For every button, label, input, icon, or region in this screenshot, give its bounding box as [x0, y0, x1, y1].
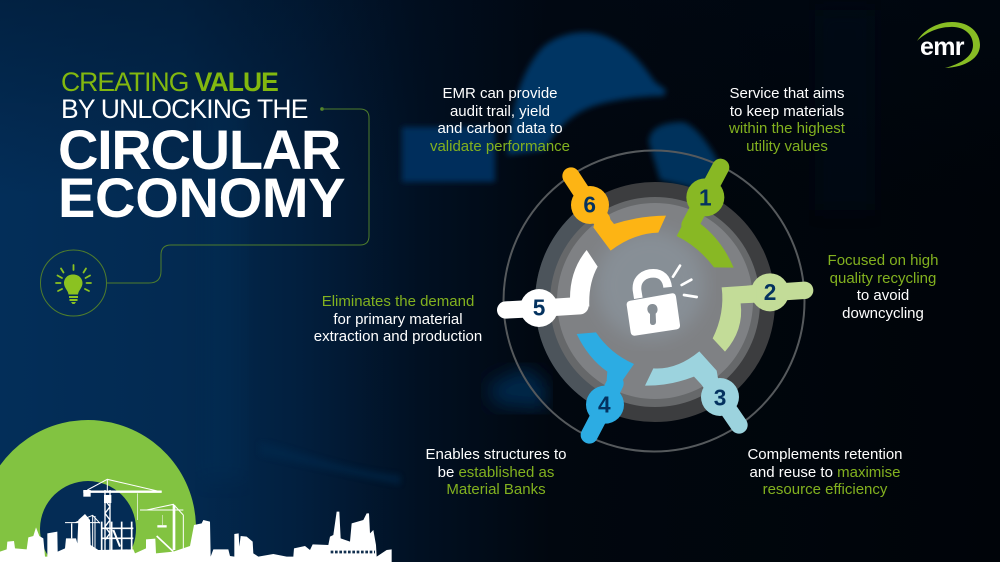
- segment 5: [506, 250, 598, 327]
- icon: lightbulb in circle: [40, 250, 106, 316]
- text: point 5: Eliminates the demand: [322, 293, 474, 310]
- text: point 3: and reuse to maximise: [750, 464, 900, 481]
- text: point 6: [430, 85, 570, 155]
- title: ECONOMY: [58, 166, 345, 229]
- text: point 6: audit trail, yield: [450, 103, 550, 120]
- text: point 2: quality recycling: [830, 270, 936, 287]
- text: point 5: for primary material: [333, 311, 463, 328]
- connector line from title to lightbulb: [107, 108, 369, 283]
- text: point 3: [747, 446, 903, 498]
- segment 1: [677, 167, 734, 268]
- outer ring: [504, 150, 804, 452]
- city skyline with cranes: [0, 479, 392, 562]
- segment 6: [571, 176, 666, 251]
- text: point 3: Complements retention: [747, 446, 903, 463]
- title line: creating value: CREATING VALUE: [61, 67, 278, 97]
- text: point 4: Enables structures to: [426, 446, 566, 463]
- text: point 1: within the highest: [729, 120, 845, 137]
- text: point 2: Focused on high: [828, 252, 938, 269]
- text: point 1: Service that aims: [729, 85, 845, 102]
- segment 5: 5: [533, 295, 545, 321]
- text: point 4: [426, 446, 566, 498]
- text: point 6: validate performance: [430, 138, 570, 155]
- text: point 2: [828, 252, 938, 322]
- text: point 4: be established as: [438, 464, 554, 481]
- green arch: [0, 420, 196, 562]
- segment 1: 1: [699, 184, 712, 210]
- segment 6: 6: [583, 191, 596, 217]
- text: point 5: [314, 293, 482, 345]
- segment 3: [645, 351, 739, 425]
- text: point 2: to avoid: [857, 287, 909, 304]
- text: point 5: extraction and production: [314, 328, 482, 345]
- concentric discs: [535, 182, 775, 422]
- text: point 6: and carbon data to: [437, 120, 563, 137]
- logo: emr swoosh: emr: [920, 33, 965, 61]
- text: point 3: resource efficiency: [763, 481, 887, 498]
- text: point 2: downcycling: [842, 305, 924, 322]
- icon: open padlock: [627, 266, 697, 336]
- segment 3: 3: [714, 385, 726, 411]
- title: BY UNLOCKING THE: [61, 94, 308, 124]
- logo: emr swoosh: [917, 22, 980, 68]
- segment 2: 2: [764, 279, 776, 305]
- text: point 6: EMR can provide: [442, 85, 558, 102]
- title: [58, 67, 345, 229]
- text: point 4: Material Banks: [446, 481, 546, 498]
- text: point 1: to keep materials: [730, 103, 844, 120]
- title: CIRCULAR: [58, 118, 340, 181]
- text: point 1: utility values: [746, 138, 828, 155]
- segment 2: [713, 273, 805, 352]
- segment 4: 4: [598, 392, 611, 418]
- text: point 1: [729, 85, 845, 155]
- segment 4: [577, 332, 634, 435]
- diagram: unlock wheel: [504, 150, 805, 452]
